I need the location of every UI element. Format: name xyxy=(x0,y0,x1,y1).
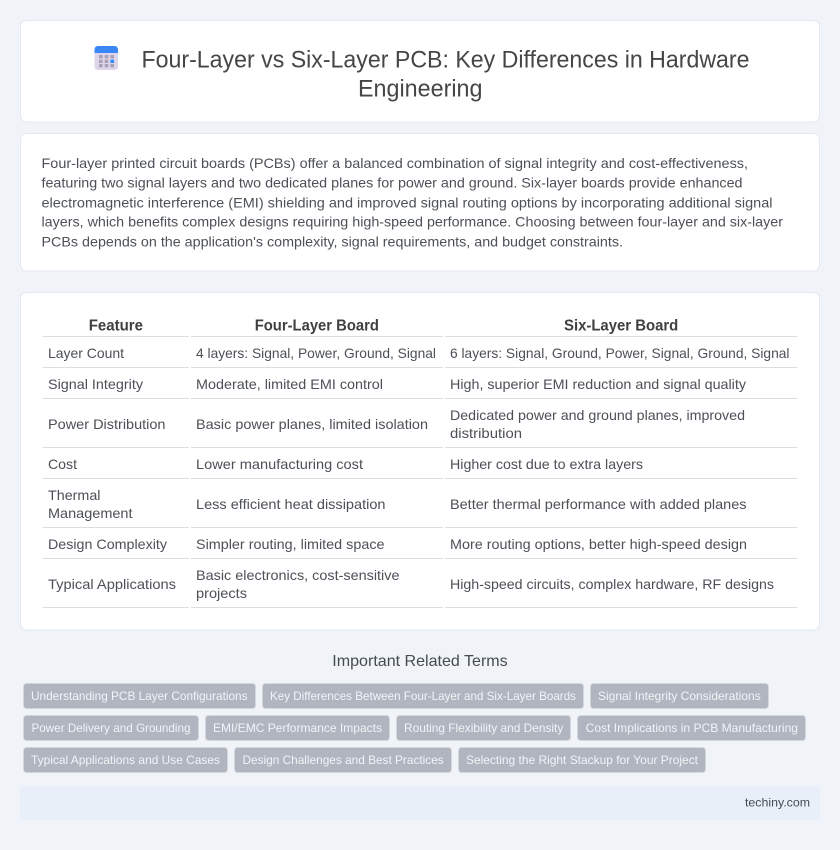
tag: EMI/EMC Performance Impacts xyxy=(213,721,382,735)
text block: intro: layers, which benefits complex designs requiring high-speed performance. Choosing between four-layer and six-layer xyxy=(42,214,783,230)
row: design complexity: Simpler routing, limited space xyxy=(196,536,385,552)
row: power distribution xyxy=(48,407,745,441)
title: Engineering xyxy=(358,76,482,102)
icon: calendar grid xyxy=(94,46,118,70)
row: cost: Cost xyxy=(48,456,77,472)
tag xyxy=(262,684,584,708)
row: thermal management: Less efficient heat dissipation xyxy=(196,496,386,512)
tag: Routing Flexibility and Density xyxy=(404,721,563,735)
footer xyxy=(20,786,820,820)
row: power distribution: Power Distribution xyxy=(48,416,166,432)
row: signal integrity: Moderate, limited EMI control xyxy=(196,376,383,392)
row: design complexity xyxy=(48,536,747,552)
panel: comparison table xyxy=(20,292,820,630)
row: layer count: 6 layers: Signal, Ground, Power, Signal, Ground, Signal xyxy=(450,345,790,361)
text block: intro xyxy=(42,155,783,250)
row: power distribution: Basic power planes, limited isolation xyxy=(196,416,428,432)
tag xyxy=(590,684,768,708)
tag xyxy=(24,684,256,708)
row: signal integrity: High, superior EMI reduction and signal quality xyxy=(450,376,746,392)
heading: important related terms: Important Related Terms xyxy=(332,653,508,670)
row: cost: Lower manufacturing cost xyxy=(196,456,363,472)
tag xyxy=(206,716,390,740)
row: power distribution: distribution xyxy=(450,425,522,441)
row: typical applications: High-speed circuits, complex hardware, RF designs xyxy=(450,576,774,592)
row: layer count: Layer Count xyxy=(48,345,124,361)
table header: Feature xyxy=(89,318,143,335)
row: signal integrity xyxy=(48,376,746,392)
tag xyxy=(458,748,706,772)
title: Four-Layer vs Six-Layer PCB: Key Differences in Hardware xyxy=(142,46,750,74)
tag xyxy=(24,748,228,772)
row: thermal management: Management xyxy=(48,505,133,521)
row: typical applications: projects xyxy=(196,585,247,601)
text block: intro: PCBs depends on the application's complexity, signal requirements, and budget constraints. xyxy=(42,234,623,250)
text block: intro: Four-layer printed circuit boards (PCBs) offer a balanced combination of signal integrity and cost-effectiveness, xyxy=(42,155,748,171)
tag xyxy=(578,716,806,740)
row: thermal management xyxy=(48,487,746,521)
row: thermal management: Better thermal performance with added planes xyxy=(450,496,746,512)
table header xyxy=(89,318,678,335)
tag xyxy=(24,716,198,740)
row: cost: Higher cost due to extra layers xyxy=(450,456,643,472)
row: cost xyxy=(48,456,643,472)
title xyxy=(142,46,750,102)
row: signal integrity: Signal Integrity xyxy=(48,376,143,392)
row: typical applications: Basic electronics, cost-sensitive xyxy=(196,567,400,583)
tag: Signal Integrity Considerations xyxy=(598,689,761,703)
table header: Four-Layer Board xyxy=(255,318,379,335)
tag: Typical Applications and Use Cases xyxy=(31,753,220,767)
tag list xyxy=(24,684,806,772)
text block: intro: featuring two signal layers and two dedicated planes for power and ground. Six-layer boards provide enhanced xyxy=(42,174,742,190)
row: design complexity: Design Complexity xyxy=(48,536,167,552)
row: layer count: 4 layers: Signal, Power, Ground, Signal xyxy=(196,345,436,361)
row: layer count xyxy=(48,345,790,361)
tag: Understanding PCB Layer Configurations xyxy=(31,689,248,703)
tag: Cost Implications in PCB Manufacturing xyxy=(586,721,798,735)
tag xyxy=(396,716,570,740)
row: typical applications xyxy=(48,567,774,601)
tag: Design Challenges and Best Practices xyxy=(242,753,444,767)
text block: intro: electromagnetic interference (EMI) shielding and improved signal routing options by incorporating additional signal xyxy=(42,194,772,210)
row: power distribution: Dedicated power and ground planes, improved xyxy=(450,407,745,423)
tag: Selecting the Right Stackup for Your Project xyxy=(466,753,699,767)
panel: header xyxy=(20,20,820,122)
table header: Six-Layer Board xyxy=(564,318,678,335)
tag xyxy=(234,748,452,772)
footer source text: techiny.com xyxy=(745,796,810,810)
row: design complexity: More routing options, better high-speed design xyxy=(450,536,747,552)
row: typical applications: Typical Applications xyxy=(48,576,176,592)
panel: intro paragraph xyxy=(20,134,820,271)
tag: Key Differences Between Four-Layer and Six-Layer Boards xyxy=(270,689,576,703)
tag: Power Delivery and Grounding xyxy=(32,721,190,735)
row: thermal management: Thermal xyxy=(48,487,100,503)
